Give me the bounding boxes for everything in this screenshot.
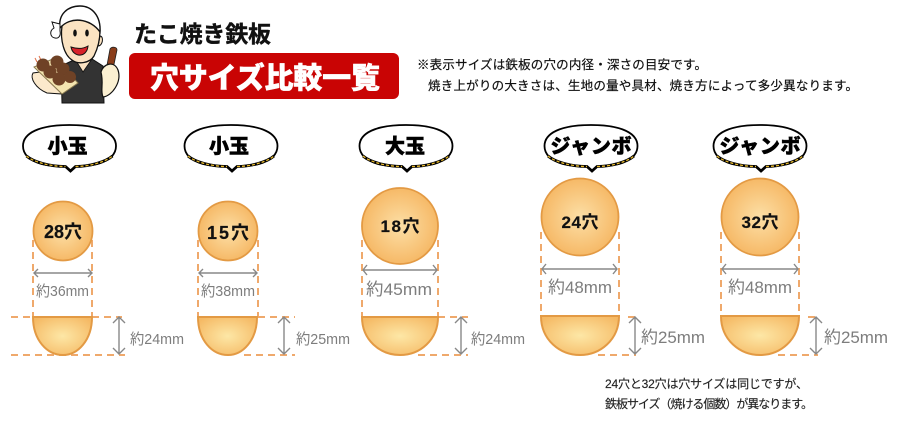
label: 約36mm: 約36mm: [36, 283, 89, 300]
arrow: depth: [810, 317, 822, 354]
arrow: width: [722, 264, 798, 274]
note text: 焼き上がりの大きさは、生地の量や具材、焼き方によって多少異なります。: [428, 78, 858, 93]
heading banner: [129, 53, 399, 99]
footnote text: 鉄板サイズ（焼ける個数）が異なります。: [605, 396, 813, 411]
circle: 15穴: [198, 202, 258, 260]
label: 約24mm: 約24mm: [130, 331, 184, 348]
label: 約45mm: 約45mm: [366, 280, 432, 299]
arrow: width: [34, 269, 92, 277]
footnote text: [605, 376, 813, 411]
label bubble: 大玉: 大玉: [385, 135, 425, 158]
title: tetsuban: たこ焼き鉄板: [134, 21, 271, 47]
arrow: depth: [455, 317, 467, 354]
heading banner: 穴サイズ比較一覧: [150, 61, 380, 95]
label: 約38mm: 約38mm: [201, 283, 255, 300]
circle: 24穴: [542, 178, 618, 256]
circle: 24穴: 24穴: [562, 213, 598, 232]
arrow: width: [199, 269, 257, 277]
label: 約25mm: 約25mm: [641, 328, 705, 347]
label: 約25mm: 約25mm: [824, 328, 888, 347]
note text: ※表示サイズは鉄板の穴の内径・深さの目安です。: [417, 57, 707, 72]
column: 28 holes: [11, 125, 184, 355]
label: 約25mm: 約25mm: [296, 331, 350, 348]
circle: 32穴: [722, 178, 798, 256]
label bubble: 小玉: 小玉: [209, 135, 249, 158]
column: 15 holes: [184, 125, 350, 355]
footnote text: 24穴と32穴は穴サイズは同じですが、: [605, 376, 808, 391]
label: 約24mm: 約24mm: [471, 331, 525, 348]
arrow: depth: [113, 317, 125, 354]
label bubble: 大玉: [360, 125, 452, 171]
label: 約48mm: 約48mm: [548, 278, 612, 297]
icon: takoyaki chef mascot: [32, 6, 119, 103]
bowl: [198, 317, 257, 355]
column: 32 holes: [714, 125, 888, 355]
bowl: [33, 317, 92, 355]
label bubble: ジャンボ: [714, 125, 806, 171]
column: 24 holes: [541, 125, 705, 355]
label bubble: ジャンボ: ジャンボ: [720, 135, 800, 158]
arrow: width: [542, 264, 617, 274]
arrow: depth: [629, 317, 641, 354]
bowl: [721, 316, 799, 355]
label bubble: 小玉: 小玉: [48, 135, 88, 158]
note text: [417, 57, 858, 93]
label bubble: 小玉: [184, 125, 278, 171]
circle: 32穴: 32穴: [742, 213, 778, 232]
bowl: [362, 317, 438, 355]
circle: 18穴: [362, 188, 438, 264]
circle: 18穴: 18穴: [380, 217, 420, 236]
label bubble: ジャンボ: ジャンボ: [550, 135, 632, 158]
circle: 28穴: 28穴: [44, 222, 82, 242]
circle: 15穴: 15穴: [207, 223, 249, 243]
column: 18 holes: [360, 125, 525, 355]
arrow: depth: [278, 317, 290, 354]
arrow: width: [363, 265, 437, 275]
circle: 28穴: [34, 202, 92, 260]
label bubble: ジャンボ: [544, 125, 638, 171]
label: 約48mm: 約48mm: [728, 278, 792, 297]
label bubble: 小玉: [23, 125, 116, 171]
bowl: [541, 316, 619, 355]
